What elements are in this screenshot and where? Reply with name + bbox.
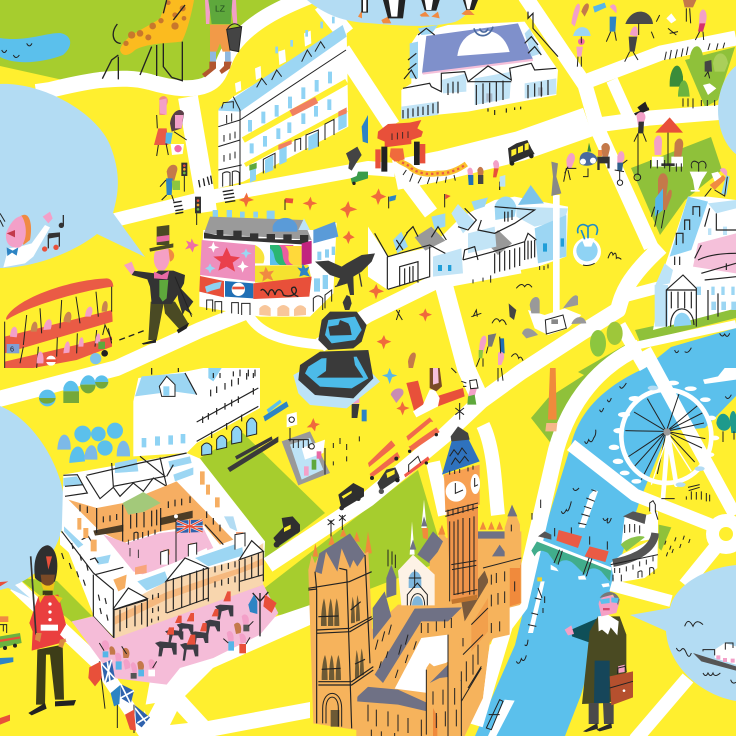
flags at parade end	[248, 592, 277, 636]
bottom right quadrant details	[356, 368, 736, 736]
trees and garden top right	[665, 43, 728, 108]
palace forecourt white block and roofs	[62, 453, 265, 638]
music notes	[42, 215, 64, 252]
woman and camera scene	[368, 368, 503, 417]
county hall	[611, 501, 690, 583]
park: cafe garden	[631, 137, 722, 235]
horse guards parade	[155, 591, 233, 661]
orange stars	[369, 188, 432, 349]
park: green by palace	[200, 433, 325, 560]
benches by green	[227, 436, 278, 472]
fountain platform	[293, 360, 380, 408]
big ben spire finial	[455, 403, 464, 420]
parade ground pink	[72, 585, 278, 685]
pedestrians on pavement	[154, 96, 187, 202]
national gallery building	[368, 175, 568, 290]
speech bubble: top centre	[307, 0, 478, 26]
park: embankment strip	[578, 345, 636, 378]
spectators by dragon	[467, 160, 499, 185]
star: pink	[185, 238, 199, 252]
parliament main mass	[356, 505, 521, 736]
park: garden top right	[685, 47, 735, 107]
chinatown gate	[375, 120, 425, 172]
black taxis	[273, 483, 364, 548]
white plaza near the mall	[140, 605, 310, 736]
seated couple in garden	[651, 173, 672, 228]
pink courtyard	[103, 528, 213, 575]
eros figure	[315, 253, 375, 310]
park: top left green	[0, 0, 285, 88]
barrister	[565, 592, 633, 732]
union flags bottom	[88, 660, 150, 733]
zookeeper LZ with bucket: LZ	[215, 3, 226, 13]
nelson column	[522, 162, 586, 338]
park: green strip below building	[635, 308, 736, 342]
giraffe	[102, 0, 194, 81]
cafe and pedestrians	[564, 143, 627, 185]
man on penny farthing	[634, 102, 649, 181]
red double decker bus	[5, 278, 144, 368]
park: green by guard	[18, 578, 92, 622]
road taxis	[377, 456, 430, 494]
top right quadrant details	[358, 0, 736, 368]
union jack on palace	[174, 514, 203, 565]
trafalgar fountain	[396, 225, 621, 361]
thames ripples	[675, 333, 730, 353]
westminster bridge	[531, 527, 611, 587]
small vehicles left	[0, 581, 22, 725]
star orange near entrance	[307, 418, 320, 431]
red london buses	[368, 417, 440, 480]
big ben tower	[442, 426, 480, 604]
top left quadrant details	[0, 0, 368, 368]
stars orange around circus	[239, 193, 357, 244]
underground entrance	[282, 412, 330, 485]
zookeeper LZ with bucket	[202, 0, 242, 77]
traffic lights and crossings	[173, 163, 235, 225]
bottom left quadrant details	[0, 368, 367, 733]
obelisk	[545, 368, 557, 431]
blue benches	[263, 400, 289, 421]
small yellow traffic islands	[143, 703, 188, 725]
fountain crowd figures	[333, 393, 367, 465]
ferry in speech bubble	[676, 621, 736, 683]
roundabout	[706, 514, 736, 554]
flags on gallery	[389, 194, 451, 208]
speech bubble: right bottom	[630, 565, 736, 701]
penguins	[358, 0, 478, 23]
royal guard	[28, 545, 76, 715]
black taxi	[508, 140, 535, 166]
top street figures	[571, 0, 707, 67]
garden fountain and deckchair	[690, 161, 730, 197]
singer in speech bubble	[0, 212, 53, 267]
river Thames	[475, 328, 736, 736]
trees on embankment	[590, 322, 623, 357]
park: green south of the avenue	[262, 470, 445, 615]
upper fountain basin	[318, 312, 367, 350]
top hat gentleman	[124, 225, 193, 345]
palace orange courtyard	[68, 471, 237, 545]
top building with blue roof	[401, 12, 558, 119]
speech bubble: right edge	[718, 60, 736, 160]
piccadilly circus building	[199, 198, 338, 317]
riverside building right	[653, 197, 736, 330]
river boats and ripples	[486, 368, 736, 736]
lower fountain basin	[298, 350, 373, 398]
red double decker bus: 6	[10, 344, 14, 353]
parasol table	[651, 117, 683, 172]
victoria tower of parliament	[308, 515, 373, 730]
lake in the park	[0, 33, 70, 62]
palace left wing	[60, 518, 127, 638]
tree row upper	[39, 375, 108, 406]
white mansion block	[133, 368, 260, 456]
palace front range	[113, 532, 263, 639]
regent street building	[218, 17, 348, 188]
park: obelisk garden	[531, 368, 600, 446]
eros statue and shaftesbury fountain	[293, 253, 380, 408]
speech bubble: left bottom	[0, 406, 65, 598]
chinese dragon	[390, 148, 466, 184]
st margaret's church	[386, 500, 435, 605]
parked blue, dark and green cars	[346, 115, 368, 185]
people on the square	[408, 303, 516, 368]
tree row lower	[57, 423, 130, 463]
lake ripples	[2, 43, 32, 57]
speech bubble: left top	[0, 84, 145, 268]
london eye	[609, 381, 719, 501]
trees right of eye	[716, 411, 736, 442]
parade spectators	[99, 614, 253, 679]
taxi windows	[284, 491, 352, 532]
